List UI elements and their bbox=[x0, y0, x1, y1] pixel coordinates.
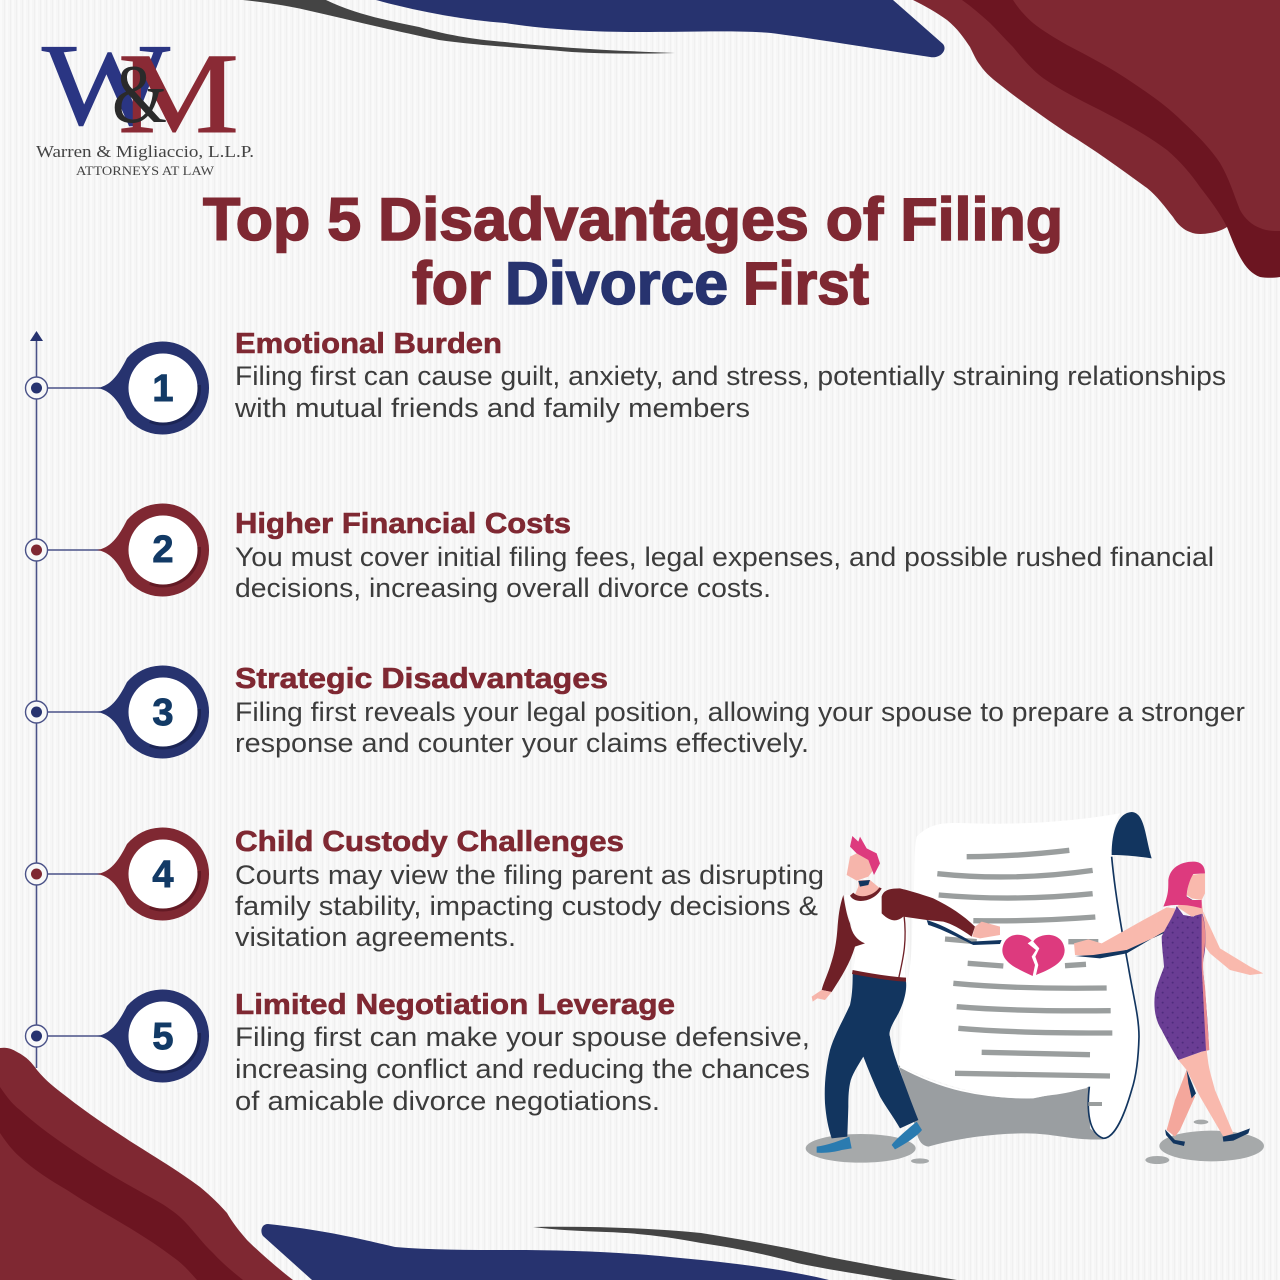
logo bbox=[36, 21, 254, 178]
title: Divorce bbox=[505, 250, 728, 317]
timeline arrow bbox=[30, 331, 43, 341]
step 2 text: higher financial costs: Higher Financial Costs bbox=[235, 508, 571, 540]
bottom blue wave bbox=[261, 1224, 829, 1280]
step 3 text: strategic disadvantages: Filing first reveals your legal position, allowing your spouse to prepare a stronger bbox=[235, 697, 1245, 727]
step 1 text: emotional burden: Filing first can cause guilt, anxiety, and stress, potentially straining relationships bbox=[235, 361, 1226, 391]
document paper bbox=[898, 812, 1152, 1147]
broken heart bbox=[1000, 933, 1067, 978]
bottom left maroon wave bbox=[0, 1048, 293, 1280]
step 5 text: limited negotiation leverage: increasing conflict and reducing the chances bbox=[235, 1054, 810, 1084]
step 5 marker bbox=[26, 990, 209, 1082]
title: Top 5 Disadvantages of Filing bbox=[203, 186, 1063, 253]
step 3 marker bbox=[26, 666, 209, 759]
logo: Warren & Migliaccio, L.L.P. bbox=[36, 142, 254, 161]
step 4 marker bbox=[26, 828, 209, 920]
step 1 marker bbox=[26, 341, 209, 434]
step 4 text: child custody challenges bbox=[235, 826, 824, 952]
step 3 text: strategic disadvantages bbox=[235, 663, 1245, 758]
step 4 text: child custody challenges: visitation agreements. bbox=[235, 922, 516, 952]
step 5 marker: 5 bbox=[152, 1016, 174, 1058]
step 2 marker bbox=[26, 504, 209, 596]
title: for bbox=[412, 250, 491, 317]
title: First bbox=[743, 250, 869, 317]
step 5 text: limited negotiation leverage: Filing first can make your spouse defensive, bbox=[235, 1022, 810, 1052]
logo: W bbox=[42, 21, 171, 150]
step 1 marker: 1 bbox=[152, 368, 174, 410]
step 4 text: child custody challenges: Courts may view the filing parent as disrupting bbox=[235, 860, 824, 890]
step 1 text: emotional burden: with mutual friends and family members bbox=[234, 393, 750, 423]
logo: ATTORNEYS AT LAW bbox=[76, 164, 214, 178]
woman bbox=[1074, 862, 1263, 1146]
timeline bbox=[30, 331, 43, 1068]
step 5 text: limited negotiation leverage bbox=[235, 989, 810, 1116]
step 2 text: higher financial costs: You must cover initial filing fees, legal expenses, and possible rushed financial bbox=[235, 542, 1214, 572]
ground shadows bbox=[806, 1120, 1264, 1164]
step 3 marker: 3 bbox=[152, 692, 174, 734]
step 1 text: emotional burden bbox=[234, 328, 1226, 423]
bottom grey swoosh bbox=[533, 1227, 957, 1280]
step 1 text: emotional burden: Emotional Burden bbox=[235, 328, 502, 360]
step 3 text: strategic disadvantages: response and counter your claims effectively. bbox=[235, 728, 809, 758]
step 4 text: child custody challenges: family stability, impacting custody decisions & bbox=[235, 891, 818, 921]
step 3 text: strategic disadvantages: Strategic Disadvantages bbox=[235, 663, 608, 695]
top right maroon wave bbox=[913, 0, 1280, 278]
step 4 marker: 4 bbox=[152, 854, 174, 896]
man bbox=[812, 836, 1002, 1153]
top blue wave bbox=[376, 0, 945, 57]
title bbox=[203, 186, 1063, 317]
step 5 text: limited negotiation leverage: of amicable divorce negotiations. bbox=[235, 1086, 660, 1116]
illustration: couple pulling apart a divorce document bbox=[806, 812, 1264, 1164]
logo: M bbox=[118, 30, 239, 157]
step 4 text: child custody challenges: Child Custody Challenges bbox=[235, 826, 624, 858]
step 2 text: higher financial costs: decisions, increasing overall divorce costs. bbox=[235, 573, 771, 603]
logo: & bbox=[112, 48, 167, 141]
step 5 text: limited negotiation leverage: Limited Negotiation Leverage bbox=[235, 989, 675, 1021]
step 2 text: higher financial costs bbox=[235, 508, 1214, 603]
step 2 marker: 2 bbox=[152, 529, 174, 571]
top grey swoosh bbox=[243, 0, 675, 54]
